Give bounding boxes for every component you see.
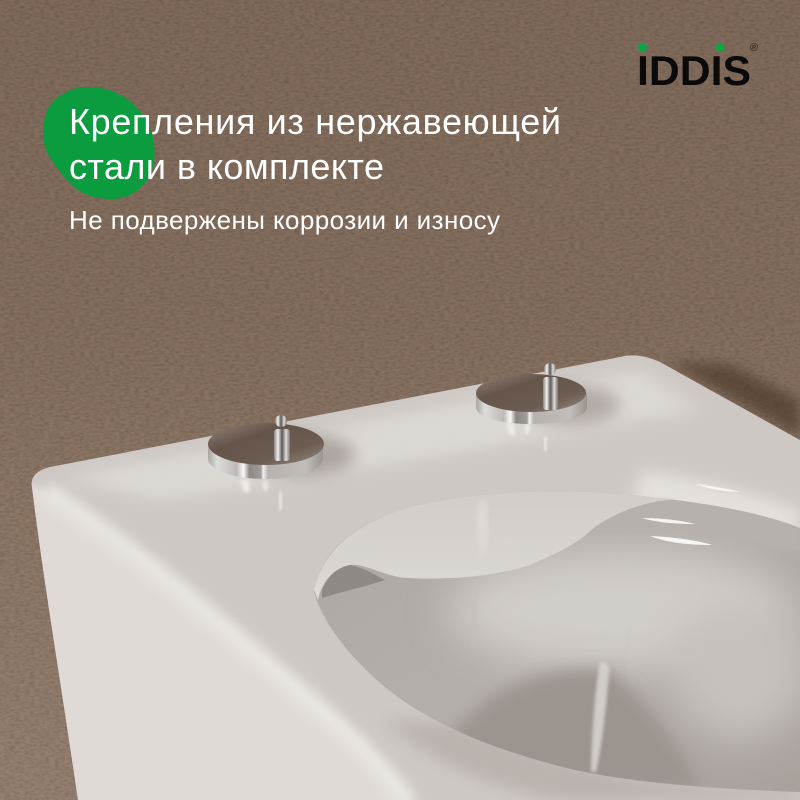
green blob accent bbox=[43, 87, 155, 199]
dark inner rim bbox=[322, 565, 385, 598]
lower rim shading bbox=[385, 720, 800, 800]
overhanging rim lobe bbox=[314, 491, 672, 600]
IDDIS logo: ® bbox=[750, 42, 758, 54]
subheading: Не подвержены коррозии и износу bbox=[69, 205, 500, 235]
right fastener pin bbox=[543, 363, 558, 410]
IDDIS logo: IDDIS bbox=[637, 47, 751, 94]
toilet bowl ceramic body bbox=[28, 355, 800, 800]
lobe inner reflection bbox=[477, 500, 488, 558]
heading bbox=[69, 101, 561, 187]
right mounting disc bbox=[476, 363, 620, 451]
front face bbox=[28, 480, 420, 800]
left mounting disc bbox=[208, 415, 355, 510]
bowl dark lower shade bbox=[450, 669, 700, 790]
heading: стали в комплекте bbox=[69, 146, 384, 187]
left fastener pin bbox=[274, 415, 290, 461]
wall shadow at right bbox=[670, 362, 800, 436]
vertical reflection strip bbox=[591, 662, 609, 772]
highlights bbox=[642, 518, 695, 524]
back inner wall bbox=[672, 500, 786, 523]
bowl light dome bbox=[450, 550, 790, 670]
heading: Крепления из нержавеющей bbox=[69, 101, 561, 142]
upper surface light band bbox=[60, 370, 700, 500]
toilet bowl opening bbox=[314, 491, 800, 792]
crease highlight bbox=[45, 490, 410, 800]
rim highlight bbox=[696, 484, 741, 492]
